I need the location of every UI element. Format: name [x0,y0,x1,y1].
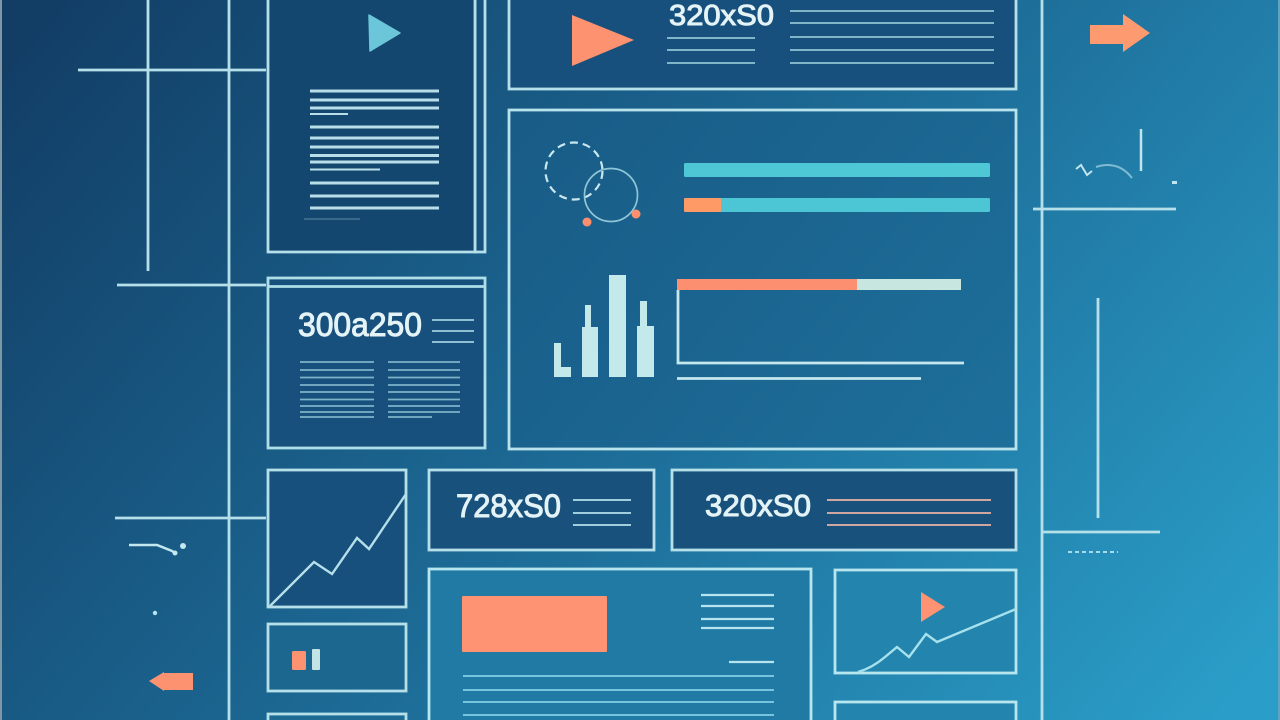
sketch: small line mark top right [1076,129,1177,184]
panel: main dashboard [509,110,1016,449]
panel: top 320x50 banner [509,0,1016,89]
document text lines [304,91,439,219]
panel: article [429,569,811,720]
body text lines [463,676,774,715]
side text lines [701,595,774,662]
icon: coral and mint squares [292,649,320,670]
icon: coral play triangle [572,15,634,66]
progress bar: teal with coral start [684,198,990,212]
panel: clipped bottom left [268,714,406,720]
line chart [858,609,1016,672]
text lines beside heading [432,320,474,342]
sketch: faint dashes bottom right [1068,551,1118,553]
heading: 320x50: 320xS0 [669,0,774,32]
icon: coral arrow left [149,672,193,691]
coral image block [462,596,607,652]
salmon text lines [827,500,991,525]
two text columns [300,362,460,417]
progress bar: teal [684,163,990,177]
heading: 320x50: 320xS0 [705,488,811,523]
icon: coral play triangle [921,592,945,622]
panel: 320x50 banner lower [672,470,1016,550]
panel: document 160x600 [268,0,485,252]
text lines [573,500,631,525]
line chart [270,494,406,606]
panel: 728x90 banner [429,470,654,550]
heading: 728x50: 728xS0 [456,488,561,524]
icon: teal play triangle [369,15,400,51]
banner text lines [667,11,994,63]
panel: play and chart [835,570,1016,673]
panel: small button [268,624,406,691]
panel: line chart dark [268,470,406,607]
sketch: small squiggle left [129,543,186,556]
bar chart [554,275,654,377]
icon: coral arrow right [1090,14,1150,52]
labelled bar: coral and mint [677,279,961,290]
panel: 300x250 [268,278,485,448]
heading: 300x250: 300a250 [298,306,422,343]
icon: overlapping circles [546,142,640,226]
dot [153,611,157,615]
panel: clipped bottom right [835,702,1016,720]
chart axis lines [677,290,964,378]
